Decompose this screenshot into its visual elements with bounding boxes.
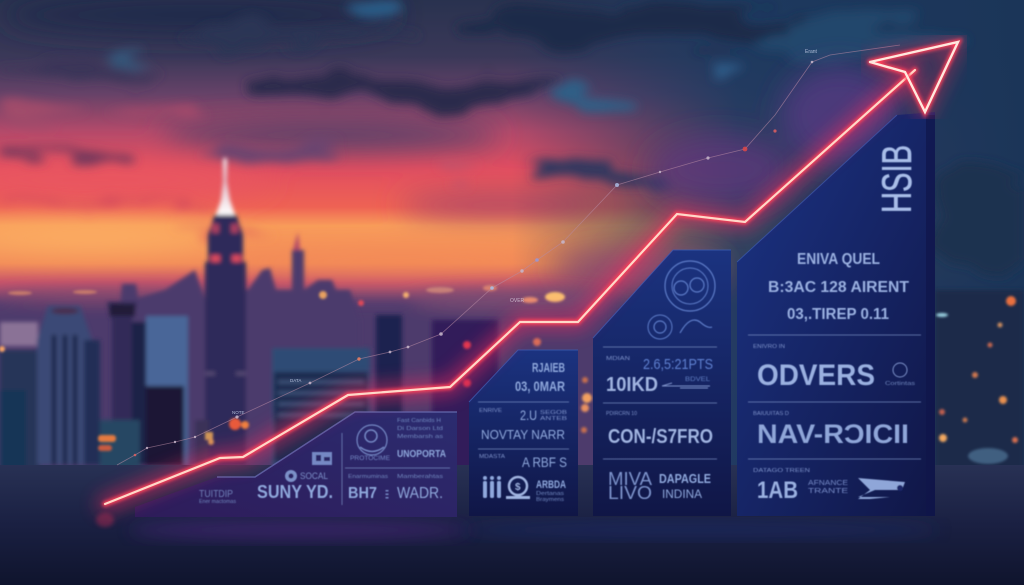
- panel 4: tall block: [737, 112, 935, 516]
- panel 1 text: upper labels: PROTOCIME: [350, 455, 391, 462]
- panel 3 text: BDVEL: [685, 377, 711, 383]
- panel 2 text: ARBDA: [536, 479, 566, 491]
- panel 4 rotated heading: HSIB: [873, 145, 920, 213]
- panel 3 text: [606, 356, 713, 503]
- panel 1 text: lower labels: TUITDIP: [199, 489, 233, 500]
- left tower: [37, 306, 92, 465]
- neon growth arrow: [105, 42, 958, 504]
- panel 2 text: A RBF S: [522, 454, 567, 470]
- bokeh city lights: [0, 285, 1018, 464]
- panel 2 text: MDASTA: [479, 454, 505, 460]
- panel 4 header text: [768, 251, 909, 323]
- panel 2: short block: [469, 350, 578, 516]
- icon: coin: [506, 477, 530, 499]
- icon: round emblem: [357, 425, 387, 455]
- panel 2 text: 03, 0MAR: [515, 378, 565, 394]
- panel 4 row: ODVERS: ENIVRO IN: [753, 344, 785, 350]
- panel 3 text: 10IKD: [606, 374, 658, 396]
- arrowhead: [870, 42, 958, 112]
- panel 1 text: lower labels: Enarmuminas: [348, 474, 389, 480]
- icon: social badge: [285, 470, 297, 482]
- panel 4 row: 1AB: DATAGO TREEN: [753, 468, 810, 474]
- panel 1 text: upper labels: [350, 418, 446, 462]
- panel 4 row: ODVERS: ODVERS: [757, 359, 875, 392]
- panel 3 text: 2.6,5:21PTS: [643, 356, 713, 373]
- panel 1 text: lower labels: WADR.: [397, 485, 443, 502]
- dark towers: [376, 315, 402, 465]
- panel 4 row: NAV-RCII: BAIUUITAS D: [753, 411, 789, 417]
- left water: [0, 322, 38, 346]
- panel 3 text: MIVA: [608, 469, 652, 489]
- panel 2 text: NOVTAY NARR: [481, 427, 565, 442]
- panel 1 text: upper labels: Membarsh as: [397, 434, 443, 440]
- panel 4 header text: 03,.TIREP 0.11: [787, 306, 889, 323]
- panel 1 text: lower labels: SUNY YD.: [257, 482, 333, 502]
- panel 3 text: MDIAN: [606, 356, 630, 362]
- panel 2 text: ANTEB: [540, 416, 567, 422]
- main tower: [205, 214, 246, 465]
- thin data trend line with markers: DATA: [290, 378, 301, 383]
- panel 1 text: lower labels: Ener mactomas: [199, 499, 237, 505]
- panel 4 row: 1AB: 1AB: [757, 477, 798, 504]
- panel 4 header text: ENIVA QUEL: [797, 251, 880, 268]
- city skyline: [0, 157, 1024, 470]
- panel 1 text: upper labels: UNOPORTA: [397, 449, 446, 460]
- icon: three people: [483, 476, 501, 498]
- panel 4 header text: B:3AC 128 AIRENT: [768, 279, 909, 296]
- floor / reflective ledge: [0, 465, 1024, 585]
- icon: arrow stroke: [662, 383, 710, 388]
- cloud streaks: [0, 25, 570, 240]
- panel 3 text: DAPAGLE: [659, 471, 711, 486]
- glow: [105, 42, 958, 504]
- main tower spire: [216, 157, 235, 215]
- panel 1 text: lower labels: [199, 471, 444, 505]
- midground silhouettes: [120, 250, 360, 470]
- panel 1 text: lower labels: SOCAL: [300, 471, 328, 481]
- panel 1 text: lower labels: Mamberahtas: [397, 474, 444, 480]
- far tower: [293, 232, 300, 250]
- thin data trend line with markers: OVER: [510, 298, 525, 304]
- wide building: [272, 348, 370, 468]
- panel 3 text: INDINA: [662, 487, 702, 501]
- icon: square glyph: [312, 452, 332, 465]
- panel 2 text: ENRIVE: [479, 408, 502, 414]
- distant skyline haze: [0, 290, 620, 480]
- thin data trend line with markers: [117, 45, 900, 465]
- panel 1: low wedge block: [135, 412, 457, 517]
- right side city: [935, 290, 1024, 470]
- panel 2 text: Dertanas: [536, 491, 565, 497]
- icon: small round emblem: [648, 315, 672, 339]
- panel 4 row: 1AB: [753, 468, 848, 504]
- panel 2 text: [479, 360, 567, 503]
- panel 2 text: SEGOB: [540, 410, 567, 416]
- panel 2 text: Braymens: [536, 497, 565, 503]
- panel 2 text: RJAIEB: [532, 360, 565, 375]
- thin data trend line with markers: NOTE: [232, 410, 245, 415]
- panel 4 row: 1AB: TRANTE: [808, 488, 848, 495]
- panel 3 text: PDIRCRN 10: [606, 411, 637, 417]
- panel 3 text: LIVO: [608, 483, 652, 503]
- panel 1 text: upper labels: Di Darson Ltd: [397, 426, 443, 432]
- panel 3 text: CON-/S7FRO: [608, 426, 713, 448]
- pale tower: [146, 316, 188, 466]
- panel 4 row: ODVERS: Cortintas: [885, 381, 916, 387]
- icon: winged logo: [858, 478, 905, 499]
- panel 2 text: 2.U: [520, 407, 537, 423]
- panel 1 text: lower labels: BH7: [348, 485, 377, 502]
- panel 4 row: 1AB: AFNANCE: [808, 480, 848, 487]
- panel 4 row: ODVERS: [753, 344, 916, 392]
- icon: coin: $: [515, 482, 521, 493]
- thin data trend line with markers: Erant: [805, 49, 818, 55]
- panel 4 row: NAV-RCII: NAV-RƆICII: [757, 419, 909, 449]
- panel 1 text: upper labels: Fast Canbids H: [397, 418, 441, 424]
- line: [105, 70, 915, 504]
- panel 3: medium block: [593, 250, 731, 516]
- notched tower: [107, 302, 137, 465]
- icon: large round emblem: [665, 261, 715, 333]
